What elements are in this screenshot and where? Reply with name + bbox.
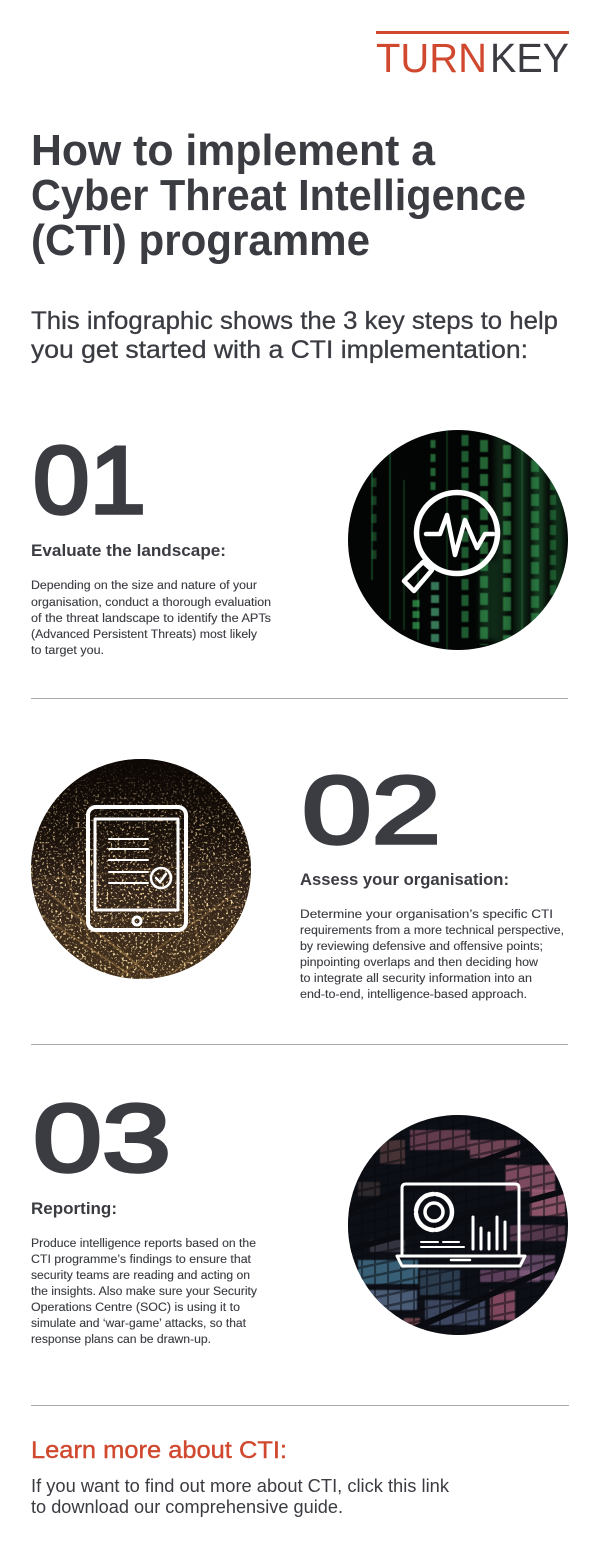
- step 3 number: 03: [33, 1085, 171, 1192]
- intro text: [31, 307, 558, 364]
- step 3 text: [31, 1236, 258, 1346]
- step 3 text: Produce intelligence reports based on the: [31, 1236, 256, 1250]
- step 2 number: 02: [302, 757, 441, 864]
- step 1 text: organisation, conduct a thorough evaluation: [31, 595, 271, 609]
- intro text: you get started with a CTI implementation:: [31, 336, 528, 364]
- call to action text: If you want to find out more about CTI, click this link: [31, 1475, 450, 1496]
- step 1 text: Depending on the size and nature of your: [31, 578, 257, 592]
- step 1 text: (Advanced Persistent Threats) most likely: [31, 627, 258, 641]
- title: [31, 126, 526, 265]
- step 2 text: end-to-end, intelligence-based approach.: [300, 987, 527, 1001]
- image: city lights at night with tablet icon: [31, 759, 251, 979]
- panel: step 1: [31, 427, 568, 657]
- divider: [31, 1405, 569, 1406]
- logo: TurnKey: [376, 31, 569, 81]
- step 1 heading: Evaluate the landscape:: [31, 541, 226, 560]
- step 3 text: simulate and ‘war-game’ attacks, so that: [31, 1316, 247, 1330]
- step 2 heading: Assess your organisation:: [300, 870, 509, 889]
- step 2 text: requirements from a more technical perspective,: [300, 923, 564, 937]
- step 3 text: security teams are reading and acting on: [31, 1268, 250, 1282]
- icon: magnifier with pulse: [404, 492, 498, 591]
- icon: laptop with charts: [397, 1184, 525, 1266]
- step 2 text: to integrate all security information into an: [300, 971, 532, 985]
- call to action text: [31, 1475, 450, 1517]
- step 1 text: [31, 578, 271, 657]
- call to action text: to download our comprehensive guide.: [31, 1496, 343, 1517]
- step 2 text: pinpointing overlaps and then deciding how: [300, 955, 538, 969]
- title: (CTI) programme: [31, 216, 370, 265]
- call to action heading: Learn more about CTI:: [31, 1437, 287, 1464]
- panel: step 3: [31, 1085, 568, 1346]
- panel: step 2: [31, 757, 564, 1001]
- icon: tablet with document: [88, 807, 186, 930]
- step 3 heading: Reporting:: [31, 1199, 117, 1218]
- image: green matrix code with magnifier icon: [348, 430, 568, 650]
- step 2 text: [300, 907, 564, 1001]
- step 3 text: response plans can be drawn-up.: [31, 1332, 211, 1346]
- step 1 text: of the threat landscape to identify the APTs: [31, 611, 271, 625]
- step 3 text: CTI programme’s findings to ensure that: [31, 1252, 252, 1266]
- logo: TurnKey: KEY: [490, 35, 569, 81]
- divider: [31, 1044, 568, 1045]
- step 3 text: Operations Centre (SOC) is using it to: [31, 1300, 240, 1314]
- step 2 text: by reviewing defensive and offensive points;: [300, 939, 543, 953]
- step 1 number: 01: [33, 427, 146, 534]
- step 1 text: to target you.: [31, 643, 104, 657]
- step 3 text: the insights. Also make sure your Security: [31, 1284, 258, 1298]
- logo: TurnKey: TURN: [376, 35, 487, 81]
- step 2 text: Determine your organisation’s specific CTI: [300, 907, 553, 921]
- intro text: This infographic shows the 3 key steps to help: [31, 307, 558, 335]
- title: How to implement a: [31, 126, 436, 175]
- title: Cyber Threat Intelligence: [31, 171, 526, 220]
- divider: [31, 698, 568, 699]
- image: office building at night with laptop icon: [348, 1115, 568, 1336]
